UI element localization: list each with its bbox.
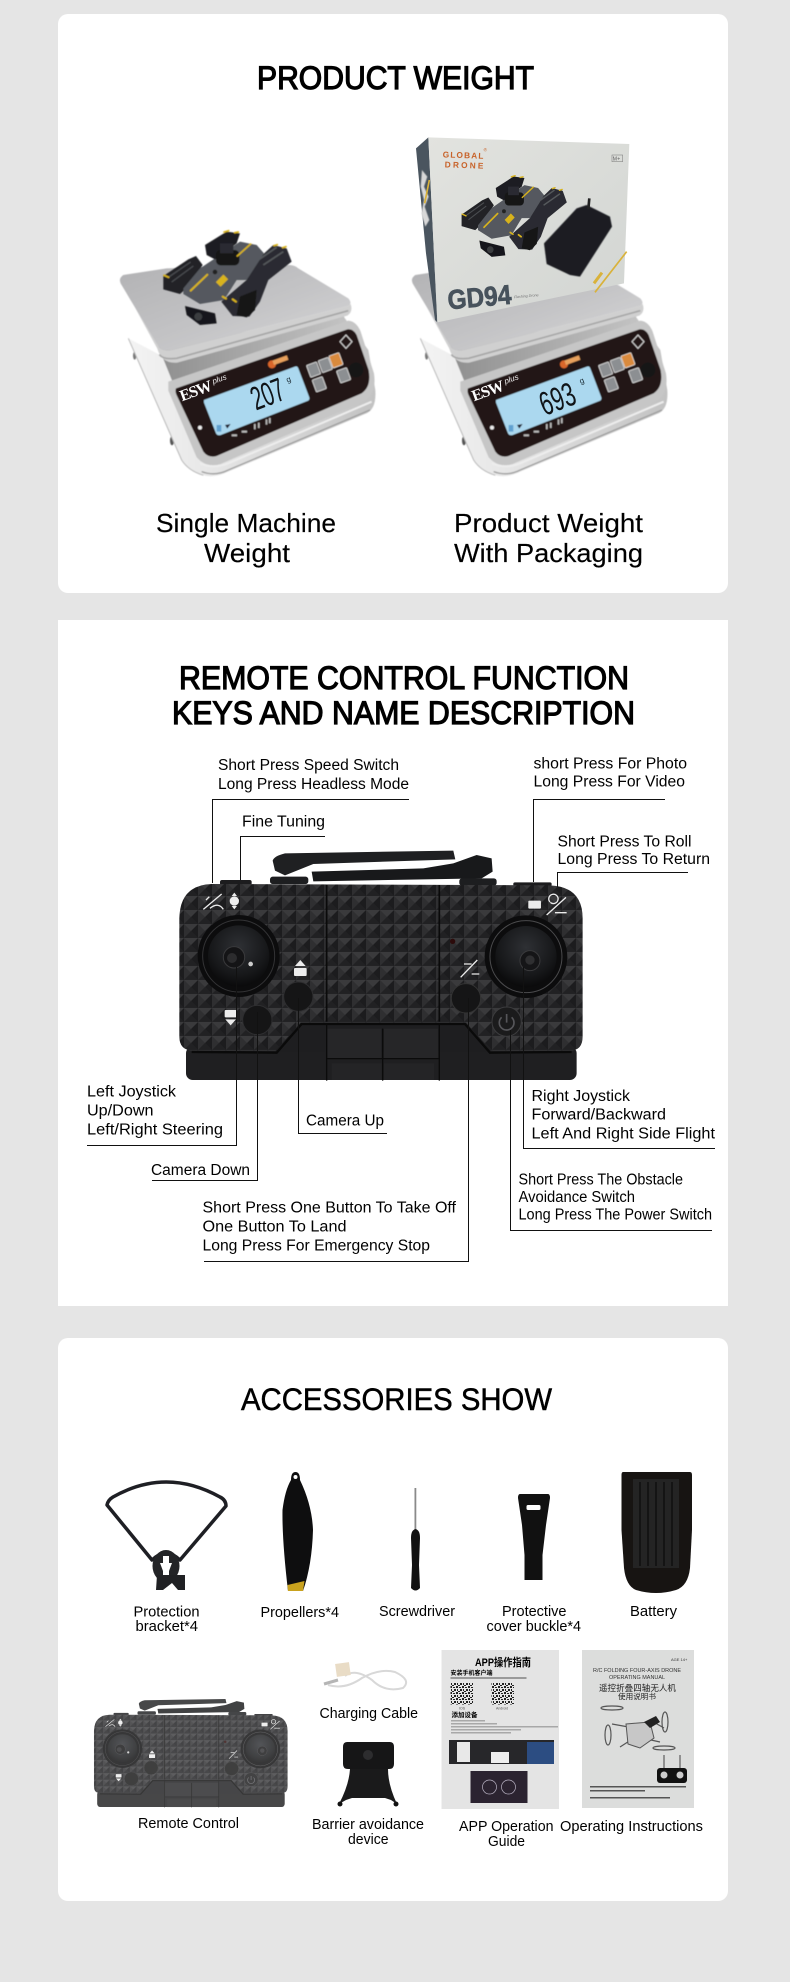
heading: remote control function [172, 660, 635, 731]
caption: single machine weight: Weight [204, 538, 291, 568]
callout: obstacle and power: Long Press The Power Switch [518, 1206, 712, 1224]
caption: propellers: Propellers*4 [260, 1604, 339, 1621]
callout: roll and return: Short Press To Roll [558, 834, 692, 850]
panel: remote control functions [58, 620, 728, 1306]
scale with boxed product: 693 g: g [578, 376, 586, 386]
scale with drone: 207 g: plus [210, 372, 228, 386]
caption: single machine weight: Single Machine [156, 508, 336, 538]
callout: right joystick: Right Joystick [532, 1088, 630, 1105]
remote control photo [179, 851, 583, 1081]
operating manual sheet [582, 1650, 694, 1808]
callout: take off and land: Long Press For Emergency Stop [202, 1238, 430, 1254]
scale with drone: 207 g: g [285, 375, 292, 385]
scale with drone: 207 g: ESW [178, 378, 215, 405]
product box: M+ [613, 156, 620, 162]
icon: protection bracket [107, 1482, 226, 1590]
scale with drone: 207 g [120, 231, 375, 476]
icon: screwdriver [411, 1488, 420, 1590]
callout: right joystick [524, 967, 716, 1148]
callout: fine tuning [240, 814, 325, 880]
scale with boxed product: 693 g: ESW [470, 378, 507, 405]
callout: photo and video: Long Press For Video [534, 774, 685, 790]
caption: product weight with packaging: Product Weight [454, 508, 644, 538]
callout: camera up: Camera Up [306, 1112, 384, 1130]
callout: photo and video [534, 756, 687, 882]
icon: battery [622, 1472, 692, 1593]
callout: take off and land [202, 998, 468, 1262]
callout: left joystick: Left/Right Steering [87, 1122, 223, 1138]
caption: protection bracket: bracket*4 [136, 1618, 198, 1635]
caption: protective cover buckle: cover buckle*4 [486, 1618, 581, 1635]
callout: camera down [151, 1012, 258, 1180]
heading: remote control function: REMOTE CONTROL FUNCTION [179, 660, 629, 696]
callout: take off and land: One Button To Land [202, 1218, 346, 1236]
product box: GLOBAL [443, 149, 484, 161]
scale with boxed product: 693 g: plus [502, 372, 520, 386]
callout: camera up [298, 998, 387, 1134]
caption: single machine weight [156, 508, 336, 568]
product box: DRONE [445, 159, 484, 171]
heading: accessories show: ACCESSORIES SHOW [241, 1381, 552, 1417]
caption: barrier avoidance device [312, 1816, 424, 1848]
caption: barrier avoidance device: Barrier avoidance [312, 1816, 424, 1833]
app operation guide sheet: Android [496, 1706, 508, 1710]
callout: fine tuning: Fine Tuning [242, 814, 325, 830]
callout: take off and land: Short Press One Button To Take Off [202, 1200, 457, 1216]
caption: barrier avoidance device: device [348, 1831, 388, 1848]
scale with boxed product: 693 g [412, 137, 667, 476]
callout: obstacle and power: Avoidance Switch [518, 1189, 635, 1206]
caption: product weight with packaging: With Packaging [454, 538, 643, 568]
panel: product weight [58, 14, 728, 593]
caption: remote control: Remote Control [138, 1815, 239, 1832]
app operation guide sheet: APP操作指南 [475, 1655, 531, 1669]
product box [416, 137, 629, 322]
scale with boxed product: 693 g: 693 [534, 376, 581, 423]
operating manual sheet: 使用说明书 [618, 1691, 657, 1701]
product box: Flashing Drone [514, 293, 539, 299]
caption: app operation guide [459, 1818, 554, 1850]
caption: charging cable: Charging Cable [320, 1705, 418, 1722]
callout: left joystick: Up/Down [87, 1102, 154, 1120]
callout: camera down: Camera Down [151, 1162, 250, 1179]
caption: app operation guide: Guide [488, 1833, 525, 1850]
operating manual sheet: AGE 14+ [671, 1657, 688, 1662]
caption: app operation guide: APP Operation [459, 1818, 554, 1835]
panel: accessories show [58, 1338, 728, 1901]
callout: left joystick: Left Joystick [87, 1084, 176, 1100]
callout: left joystick [87, 967, 236, 1146]
caption: protective cover buckle [486, 1603, 581, 1635]
callout: right joystick: Forward/Backward [532, 1106, 666, 1124]
icon: barrier avoidance device [338, 1742, 398, 1806]
operating manual sheet: 遥控折叠四轴无人机 [599, 1683, 676, 1693]
operating manual sheet: R/C FOLDING FOUR-AXIS DRONE [593, 1668, 681, 1674]
callout: roll and return [558, 834, 710, 887]
heading: remote control function: KEYS AND NAME DESCRIPTION [172, 695, 635, 731]
callout: speed switch: Long Press Headless Mode [218, 776, 409, 793]
remote control accessory [94, 1699, 288, 1807]
caption: protective cover buckle: Protective [502, 1603, 566, 1620]
product box: ® [484, 147, 488, 153]
icon: propeller [282, 1472, 313, 1591]
callout: roll and return: Long Press To Return [558, 851, 710, 868]
app operation guide sheet [442, 1650, 559, 1809]
icon: cover buckle [518, 1494, 550, 1580]
callout: obstacle and power [510, 1030, 712, 1230]
callout: speed switch [212, 757, 409, 883]
caption: protection bracket [134, 1604, 200, 1635]
caption: screwdriver: Screwdriver [379, 1603, 455, 1620]
caption: operating instructions: Operating Instructions [560, 1818, 703, 1835]
app operation guide sheet: 安装手机客户端 [450, 1669, 493, 1677]
product box: GD94 [446, 279, 513, 315]
caption: protection bracket: Protection [134, 1604, 200, 1620]
callout: obstacle and power: Short Press The Obstacle [518, 1172, 683, 1188]
callout: right joystick: Left And Right Side Flight [532, 1126, 716, 1142]
caption: product weight with packaging [454, 508, 644, 568]
heading: product weight: PRODUCT WEIGHT [257, 60, 534, 96]
operating manual sheet: OPERATING MANUAL [609, 1675, 665, 1681]
icon: charging cable [324, 1662, 406, 1689]
caption: battery: Battery [630, 1603, 677, 1620]
app operation guide sheet: IOS [459, 1706, 466, 1710]
app operation guide sheet: 添加设备 [452, 1710, 478, 1719]
callout: speed switch: Short Press Speed Switch [218, 757, 399, 774]
scale with drone: 207 g: 207 [246, 372, 290, 418]
callout: photo and video: short Press For Photo [534, 756, 687, 772]
